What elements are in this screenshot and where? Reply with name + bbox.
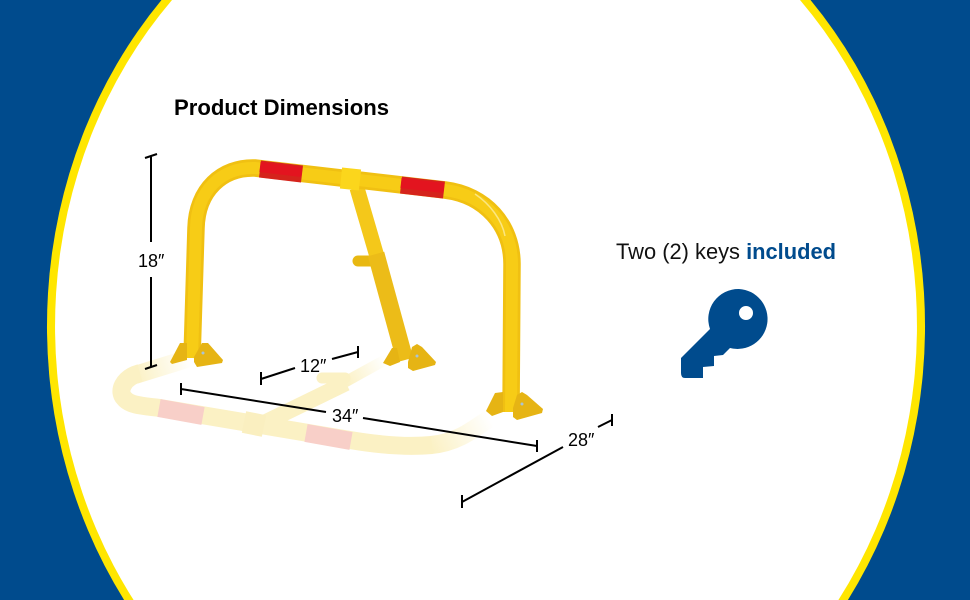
right foot <box>486 392 543 420</box>
title: Product Dimensions <box>174 95 389 120</box>
dimension: 28 inches <box>462 414 612 508</box>
ghost lowered barrier <box>121 358 490 446</box>
dimension: 34 inches: 34″ <box>332 406 359 426</box>
middle foot <box>383 344 436 371</box>
dimension: 34 inches <box>181 383 537 452</box>
dimension: 12 inches <box>261 346 358 385</box>
keys caption: Two (2) keys included <box>616 239 836 264</box>
dimension: height 18 inches: 18″ <box>138 251 165 271</box>
dimension: 28 inches: 28″ <box>568 430 595 450</box>
icon: key <box>681 289 768 378</box>
barrier: strut <box>357 188 405 360</box>
left foot <box>170 343 223 367</box>
dimension: 12 inches: 12″ <box>300 356 327 376</box>
dimension: height 18 inches <box>138 154 165 369</box>
barrier: main hoop with red reflective bands <box>192 167 512 412</box>
